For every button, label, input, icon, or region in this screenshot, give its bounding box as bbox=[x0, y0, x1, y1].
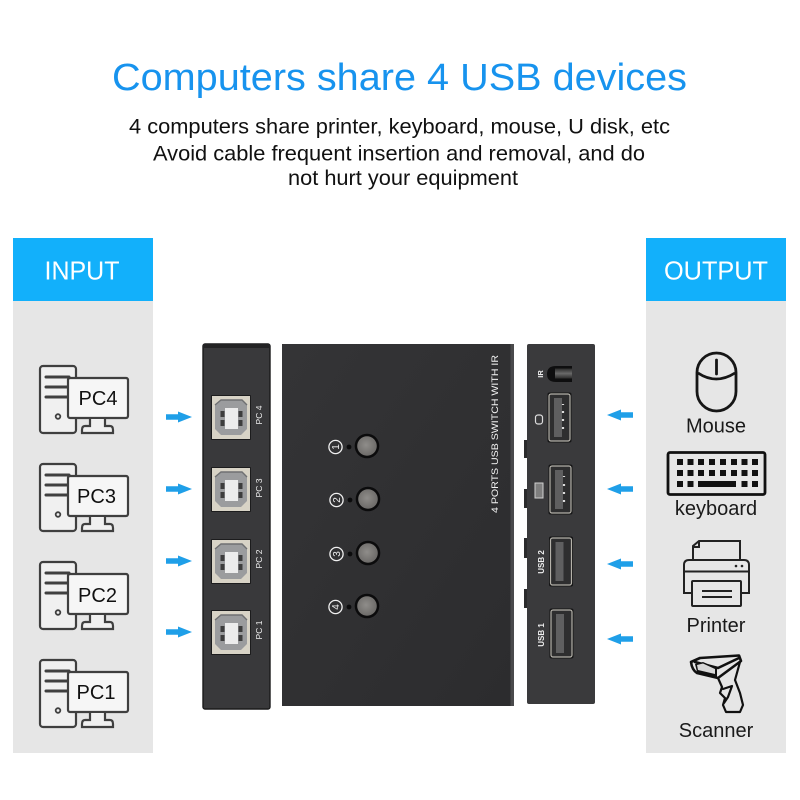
arrows: output side bbox=[607, 410, 633, 644]
icon: PC4 bbox=[40, 366, 128, 433]
arrows: input side bbox=[166, 412, 192, 638]
icon: PC2: PC2 bbox=[78, 585, 117, 607]
title: Computers share 4 USB devices bbox=[112, 57, 687, 99]
port: keyboard bbox=[535, 464, 572, 514]
port: PC 4 bbox=[211, 395, 264, 440]
icon: mouse bbox=[697, 353, 736, 411]
port: USB 1: USB 1 bbox=[537, 623, 546, 647]
icon: printer bbox=[684, 541, 749, 606]
intro text block: Avoid cable frequent insertion and removal, and do bbox=[153, 142, 645, 166]
port: mouse bbox=[536, 392, 572, 442]
output heading bbox=[646, 238, 786, 301]
intro text block: not hurt your equipment bbox=[288, 167, 518, 190]
intro text block bbox=[129, 116, 670, 190]
panel: input bbox=[13, 238, 153, 753]
button 1 bbox=[329, 434, 379, 458]
intro text block: 4 computers share printer, keyboard, mouse, U disk, etc bbox=[129, 116, 670, 138]
icon: PC3 bbox=[40, 464, 128, 531]
button 1: 1 bbox=[331, 444, 342, 450]
port: PC 1 bbox=[211, 610, 264, 655]
panel: USB-A output side of the switch bbox=[524, 344, 595, 704]
button 2: 2 bbox=[332, 497, 343, 503]
port: PC 3: PC 3 bbox=[254, 478, 264, 497]
icon: PC4: PC4 bbox=[79, 388, 117, 410]
port: USB 2: USB 2 bbox=[537, 550, 546, 574]
input heading bbox=[13, 238, 153, 301]
icon: PC3: PC3 bbox=[77, 486, 116, 508]
panel: output bbox=[646, 238, 786, 753]
output heading: OUTPUT bbox=[664, 256, 768, 286]
icon: keyboard bbox=[668, 452, 765, 494]
port: USB 1 bbox=[537, 608, 574, 658]
label: Scanner: Scanner bbox=[679, 720, 754, 742]
device label: 4 PORTS USB SWITCH WITH IR bbox=[490, 355, 501, 513]
port: PC 2 bbox=[211, 539, 264, 584]
panel: USB-B input side of the switch bbox=[203, 344, 270, 709]
button 2 bbox=[330, 487, 380, 511]
icon: PC1 bbox=[40, 660, 128, 727]
button 3 bbox=[330, 541, 380, 565]
IR sensor: IR bbox=[536, 370, 545, 378]
label: keyboard: keyboard bbox=[675, 498, 757, 520]
icon: PC1: PC1 bbox=[77, 682, 115, 704]
button 3: 3 bbox=[332, 551, 343, 557]
port: PC 3 bbox=[211, 467, 264, 512]
label: Mouse: Mouse bbox=[686, 416, 746, 438]
button 4 bbox=[329, 594, 379, 618]
button 4: 4 bbox=[331, 604, 342, 610]
label: Printer: Printer bbox=[687, 615, 746, 637]
port: PC 1: PC 1 bbox=[254, 620, 264, 639]
input heading: INPUT bbox=[44, 256, 120, 286]
port: USB 2 bbox=[537, 536, 573, 586]
icon: PC2 bbox=[40, 562, 128, 629]
panel: switch top face bbox=[282, 344, 514, 706]
icon: scanner bbox=[691, 656, 743, 712]
port: PC 4: PC 4 bbox=[254, 405, 264, 424]
IR sensor bbox=[536, 366, 572, 382]
port: PC 2: PC 2 bbox=[254, 549, 264, 568]
